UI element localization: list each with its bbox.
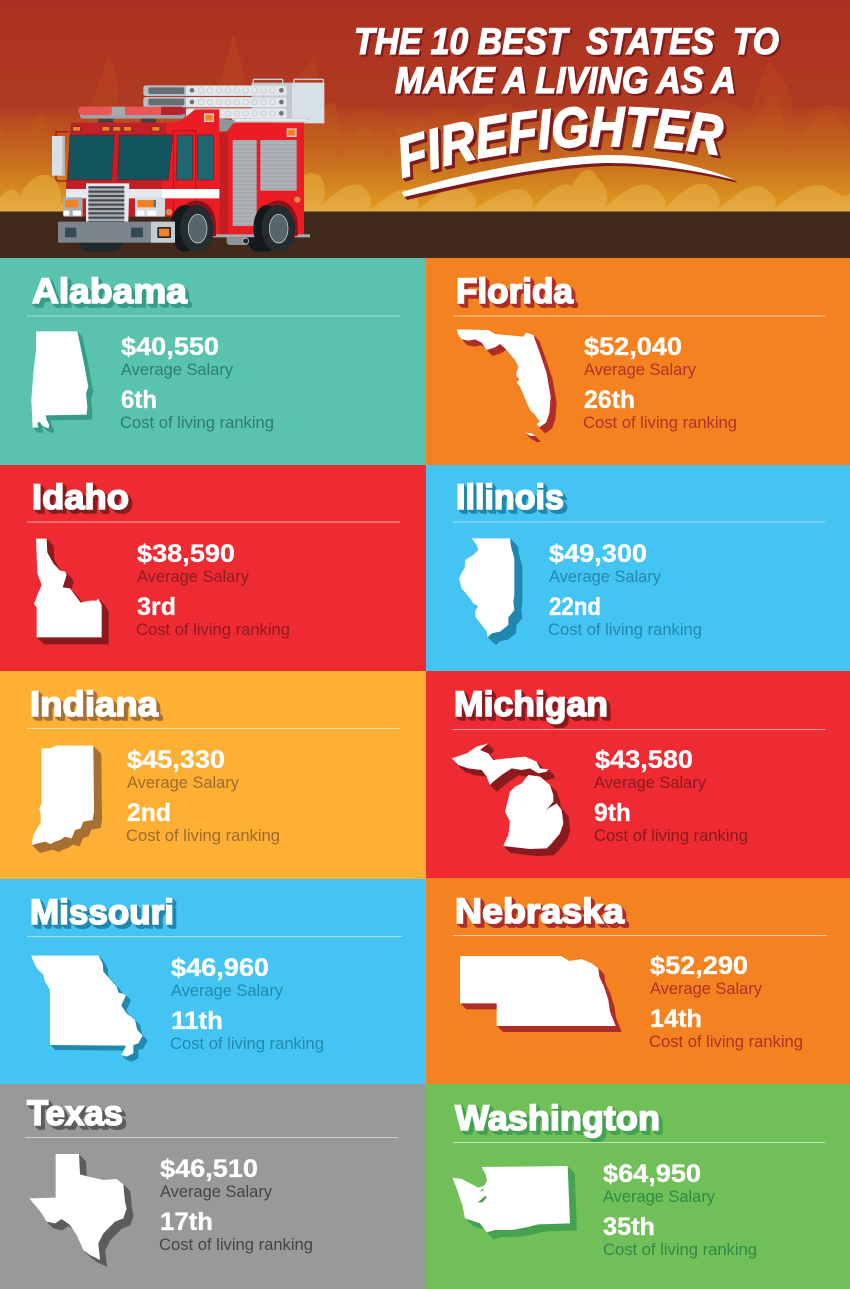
stats: Illinois: [548, 540, 702, 639]
stats: Washington: $64,950: [603, 1160, 701, 1188]
stats: Illinois: 22nd: [549, 593, 601, 621]
icon: Washington outline: [452, 1166, 570, 1232]
stats: Michigan: [594, 746, 748, 845]
heading: Nebraska: Nebraska: [455, 892, 625, 931]
stats: Florida: 26th: [584, 386, 635, 414]
stats: Washington: 35th: [603, 1213, 655, 1241]
heading: Alabama: Alabama: [32, 272, 188, 311]
heading: Missouri: Missouri: [30, 893, 174, 932]
stats: Alabama: Average Salary: [121, 360, 233, 379]
stats: Washington: Average Salary: [603, 1187, 715, 1206]
heading: Indiana: Indiana: [30, 685, 159, 724]
title word: firefighter: FIREFIGHTER: [400, 106, 727, 182]
stats: Texas: [159, 1155, 313, 1254]
icon: fire truck: [52, 79, 324, 252]
icon: Alabama outline: [31, 331, 88, 428]
heading: Idaho: Idaho: [32, 478, 129, 517]
rear body: [219, 118, 309, 237]
stats: Florida: $52,040: [584, 333, 682, 361]
stats: Michigan: $43,580: [595, 746, 693, 774]
panel: Texas: [0, 1084, 426, 1289]
panel: Michigan: [426, 671, 850, 878]
mid orange flames: [0, 96, 850, 212]
icon: Nebraska outline: [460, 956, 616, 1026]
panel: Washington: [426, 1084, 850, 1289]
header: fire scene: [0, 0, 850, 258]
icon: Idaho outline: [34, 539, 102, 637]
stats: Michigan: Cost of living ranking: [594, 826, 748, 845]
heading: Texas: Texas: [27, 1094, 123, 1133]
stats: Missouri: $46,960: [171, 954, 269, 982]
stats: Alabama: Cost of living ranking: [120, 413, 274, 432]
stats: Michigan: 9th: [594, 799, 631, 827]
panel: Missouri: [0, 879, 426, 1084]
heading: Michigan: Michigan: [454, 685, 608, 724]
icon: Florida outline: [457, 329, 551, 436]
stats: Nebraska: Cost of living ranking: [649, 1032, 803, 1051]
stats: Florida: Average Salary: [584, 360, 696, 379]
stats: Texas: 17th: [160, 1208, 213, 1236]
stats: Idaho: $38,590: [137, 540, 235, 568]
stats: Idaho: Average Salary: [137, 567, 249, 586]
stats: Indiana: [126, 746, 280, 845]
heading: Washington: Washington: [455, 1099, 660, 1138]
stats: Idaho: Cost of living ranking: [136, 620, 290, 639]
front bumper: [58, 222, 175, 243]
stats: Illinois: Average Salary: [549, 567, 661, 586]
stats: Missouri: Cost of living ranking: [170, 1034, 324, 1053]
stats: Texas: Average Salary: [160, 1182, 272, 1201]
stats: Nebraska: $52,290: [650, 952, 748, 980]
swoosh underline: [402, 155, 735, 197]
ladder rack: [143, 79, 324, 123]
light bar: [78, 107, 185, 123]
stats: Texas: $46,510: [160, 1155, 258, 1183]
heading: Illinois: Illinois: [456, 478, 564, 517]
stats: Florida: [583, 333, 737, 432]
title: [354, 21, 781, 200]
icon: Indiana outline: [32, 746, 94, 845]
stats: Indiana: Cost of living ranking: [126, 826, 280, 845]
icon: Texas outline: [29, 1154, 127, 1260]
wheels and chassis: [78, 201, 310, 252]
panel: Nebraska: [426, 878, 850, 1084]
pale lower flames: [0, 170, 850, 220]
stats: Missouri: [170, 954, 324, 1053]
icon: Michigan outline: [452, 743, 563, 849]
stats: Michigan: Average Salary: [594, 773, 706, 792]
stats: Alabama: 6th: [121, 386, 157, 414]
icon: Illinois outline: [459, 538, 514, 637]
icon: Missouri outline: [31, 956, 143, 1057]
title line 1: THE 10 BEST STATES TO: [354, 21, 779, 62]
panel: Idaho: [0, 465, 426, 671]
panel: Illinois: [426, 465, 850, 671]
panel: Alabama: [0, 258, 426, 465]
stats: Indiana: $45,330: [127, 746, 225, 774]
stats: Idaho: [136, 540, 290, 639]
tall faint flames: [0, 33, 850, 212]
heading: Florida: Florida: [456, 272, 574, 311]
stats: Missouri: 11th: [171, 1007, 223, 1035]
stats: Idaho: 3rd: [137, 593, 176, 621]
stats: Missouri: Average Salary: [171, 981, 283, 1000]
panel: Indiana: [0, 671, 426, 879]
panel: Florida: [426, 258, 850, 465]
stats: Alabama: [120, 333, 274, 432]
stats: Washington: [603, 1160, 757, 1259]
stats: Nebraska: [649, 952, 803, 1051]
stats: Nebraska: Average Salary: [650, 979, 762, 998]
stats: Washington: Cost of living ranking: [603, 1240, 757, 1259]
title line 2: MAKE A LIVING AS A: [395, 60, 736, 101]
cab: [52, 109, 219, 237]
stats: Florida: Cost of living ranking: [583, 413, 737, 432]
stats: Illinois: $49,300: [549, 540, 647, 568]
stats: Alabama: $40,550: [121, 333, 219, 361]
stats: Nebraska: 14th: [650, 1005, 702, 1033]
stats: Indiana: 2nd: [127, 799, 171, 827]
stats: Indiana: Average Salary: [127, 773, 239, 792]
stats: Texas: Cost of living ranking: [159, 1235, 313, 1254]
stats: Illinois: Cost of living ranking: [548, 620, 702, 639]
grille and headlights: [63, 183, 172, 222]
